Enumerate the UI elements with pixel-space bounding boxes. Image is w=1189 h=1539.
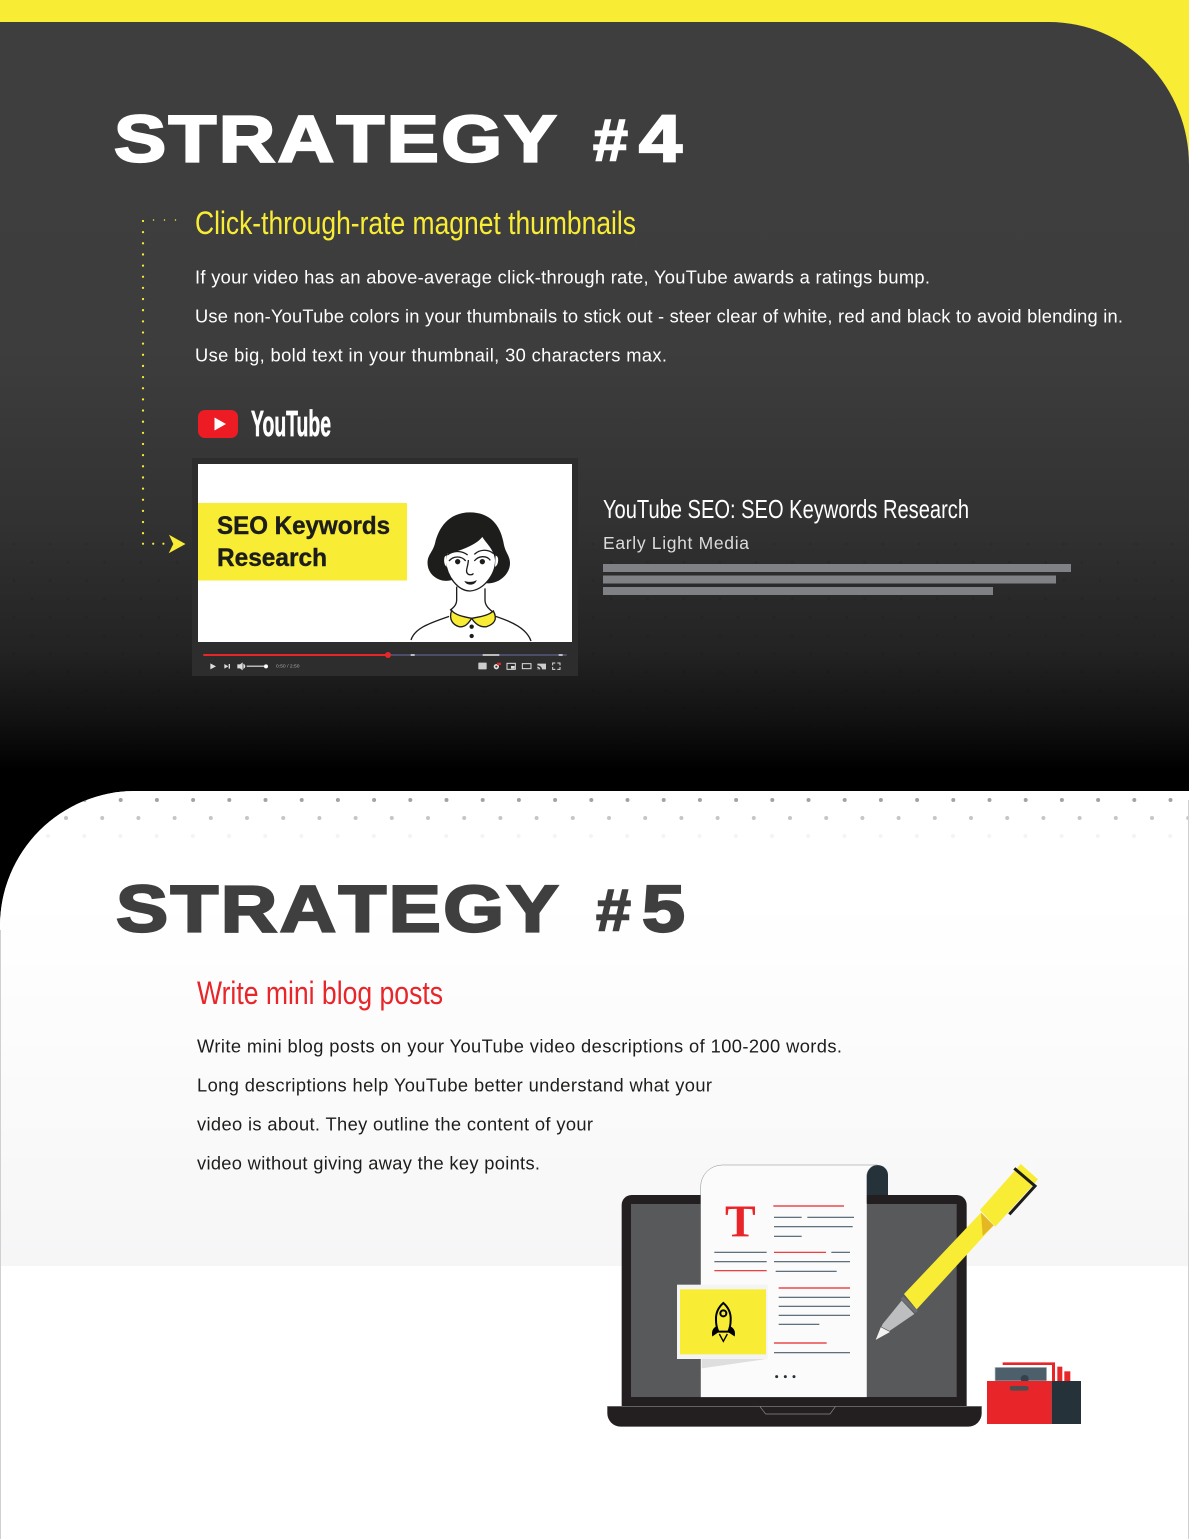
video thumbnail player [192,458,578,676]
toolbox [987,1362,1081,1424]
description placeholder bars [603,564,1071,595]
icon: youtube logo [198,403,331,444]
thumbnail label [198,503,407,580]
heading: strategy 5 [116,872,685,946]
heading: strategy 5: STRATEGY [116,872,561,946]
text block: strategy 4 body [195,266,1123,366]
video channel: Early Light Media [603,533,749,553]
subheading: click-through-rate: Click-through-rate magnet thumbnails [195,205,636,241]
heading: strategy 5: # [596,878,631,944]
heading: strategy 4: # [593,108,628,174]
text block: strategy 5 body: video is about. They outline the content of your [197,1114,593,1134]
heading: strategy 4: 4 [639,102,683,176]
dotted connector with arrow [143,220,186,553]
subheading: write mini blog posts: Write mini blog posts [197,975,443,1011]
heading: strategy 5: 5 [642,872,685,946]
document text lines [714,1206,854,1353]
text block: strategy 5 body [197,1036,842,1174]
player controls [203,652,567,670]
text block: strategy 5 body: Write mini blog posts on your YouTube video descriptions of 100-200 words. [197,1036,842,1056]
thumbnail label: SEO Keywords [217,512,390,540]
video title: YouTube SEO: SEO Keywords Research [603,494,969,524]
ellipsis dots [775,1375,795,1378]
illustration: laptop with blog post [607,1164,1081,1427]
yellow card with rocket [677,1285,768,1368]
document scroll [701,1165,888,1397]
thumbnail label: Research [217,544,327,572]
illustration: woman [411,512,531,641]
text block: strategy 5 body: video without giving away the key points. [197,1152,540,1174]
player controls: 0:50 / 2:50 [276,664,300,670]
panel: strategy 5 light [0,791,1189,1539]
icon: rocket [712,1303,734,1341]
icon: youtube logo: YouTube [251,403,331,444]
top yellow band [0,0,1189,190]
document scroll: T [725,1196,756,1247]
laptop [607,1195,982,1427]
pen [875,1164,1038,1341]
text block: strategy 4 body: If your video has an above-average click-through rate, YouTube awards a ratings bump. [195,266,930,288]
text block: strategy 4 body: Use big, bold text in your thumbnail, 30 characters max. [195,344,667,366]
heading: strategy 4 [114,102,683,176]
panel: strategy 4 dark [0,22,1189,775]
text block: strategy 4 body: Use non-YouTube colors in your thumbnails to stick out - steer clear of white, red and black to avoid blending in. [195,306,1123,326]
heading: strategy 4: STRATEGY [114,102,559,176]
text block: strategy 5 body: Long descriptions help YouTube better understand what your [197,1074,712,1096]
